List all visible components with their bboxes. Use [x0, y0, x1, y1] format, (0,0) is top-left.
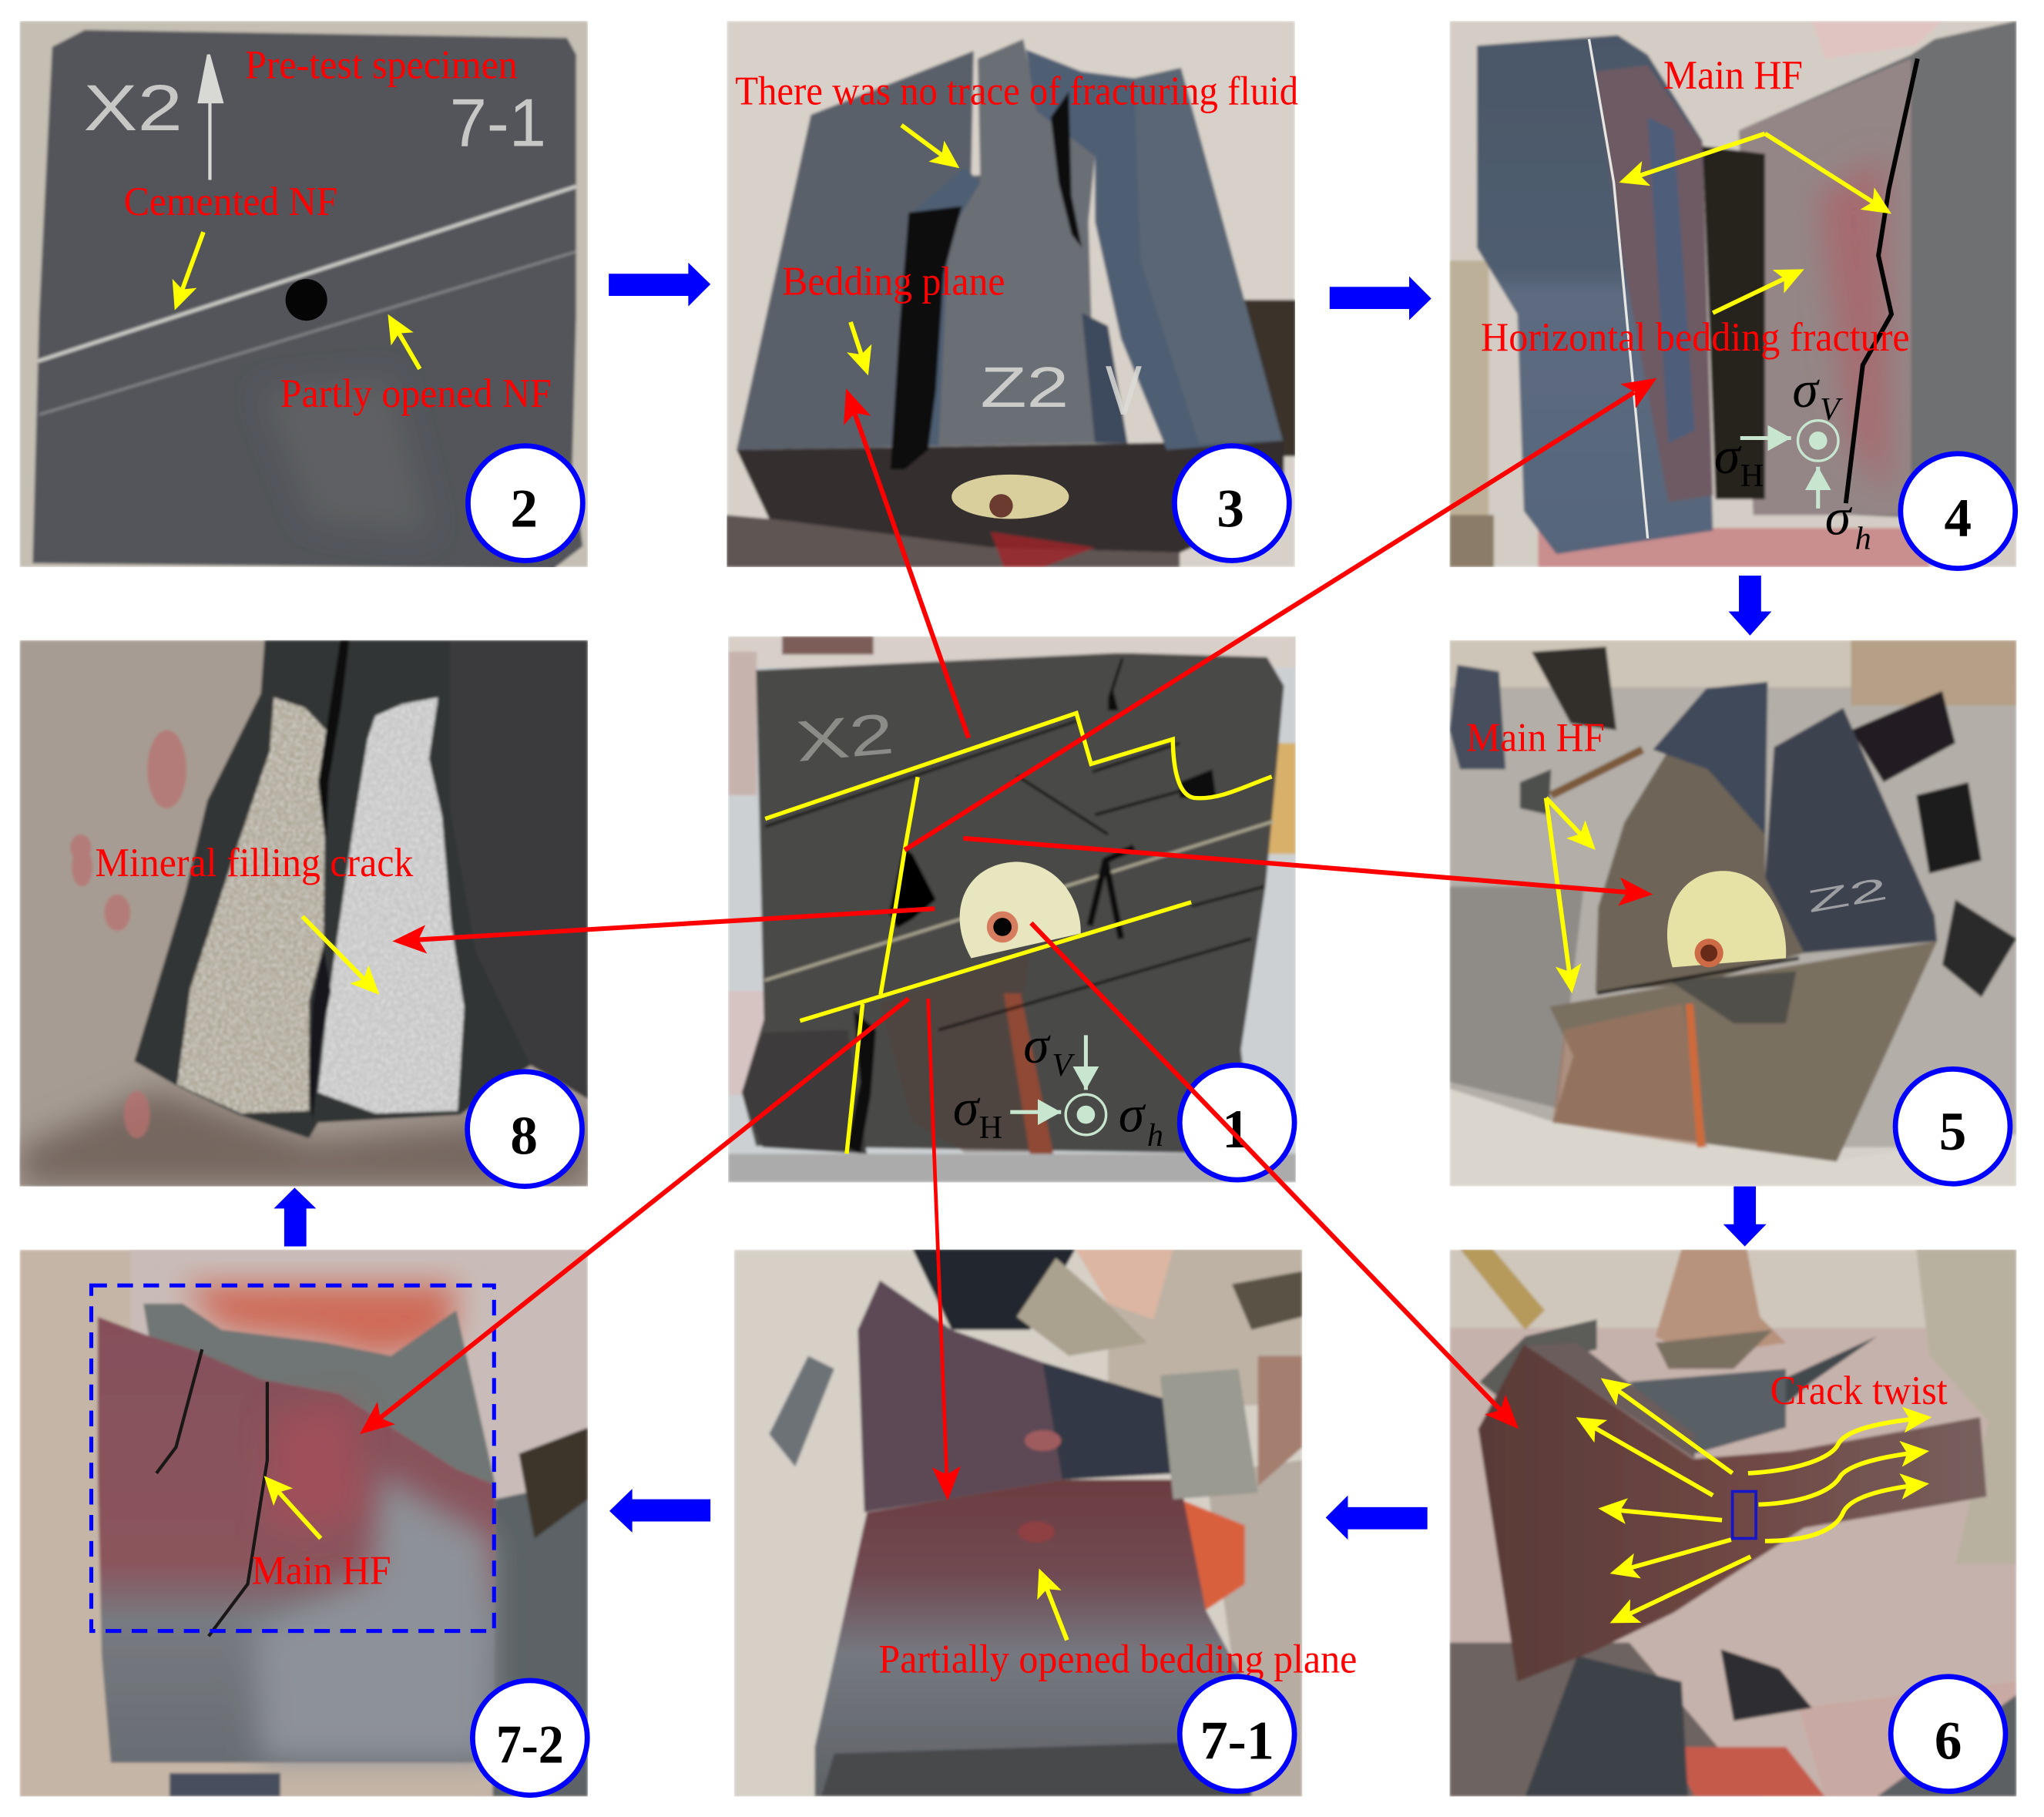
panel 4: main HF and bedding fracture [1449, 21, 2016, 567]
chalk mark X2: X2 [794, 701, 896, 774]
label: Main HF [1466, 716, 1605, 761]
badge 7-1 [1180, 1677, 1294, 1792]
arrow: main HF upper [1546, 798, 1596, 850]
red arrow: to panel 3 [846, 388, 968, 738]
crack: main HF trace [1846, 59, 1918, 503]
arrow: main HF right [1765, 133, 1891, 213]
label: Mineral filling crack [96, 841, 414, 885]
icon: borehole [286, 279, 327, 321]
panel 3: fractured specimen [726, 21, 1298, 567]
stress symbol: σ [1119, 1086, 1146, 1144]
icon: pipe [989, 494, 1013, 518]
arrow: partly opened NF [388, 314, 420, 369]
stress symbol: V [1820, 391, 1843, 428]
icon: pipe [987, 912, 1018, 942]
stress symbol: h [1855, 520, 1871, 556]
chalk mark Z2: Z2 [1804, 871, 1890, 919]
badge 8: 8 [510, 1106, 538, 1166]
stress symbol: σ [1825, 489, 1853, 546]
badge 7-2 [472, 1681, 587, 1795]
stress symbol: σ [1023, 1016, 1051, 1074]
vein: white line [1589, 39, 1648, 539]
fracture trace lines [765, 713, 1272, 1154]
blue arrow: 7-1 to 7-2 [609, 1489, 710, 1533]
crack: main HF [156, 1349, 267, 1636]
stress symbol: h [1147, 1117, 1163, 1154]
label: Bedding plane [782, 259, 1005, 304]
chalk mark V: V [1106, 351, 1142, 430]
stress symbol: V [1052, 1047, 1075, 1083]
blue arrow: 2 to 3 [609, 263, 710, 307]
arrow: bedding plane [1039, 1568, 1067, 1640]
stress symbol [1714, 361, 1871, 556]
label: Main HF [252, 1549, 391, 1594]
stress symbol: σ [953, 1079, 981, 1137]
arrow: main HF left [1619, 133, 1765, 183]
chalk mark Z2: Z2 [980, 355, 1069, 419]
icon: injection dish [960, 861, 1081, 959]
chalk arrow [200, 55, 222, 180]
blue arrow: 3 to 4 [1330, 277, 1431, 320]
stress symbol: σ [1792, 361, 1820, 418]
panel 2: pre-test specimen [19, 21, 588, 569]
badge 1: 1 [1222, 1100, 1250, 1160]
badge 8 [468, 1072, 582, 1187]
blue arrow: 7-2 to 8 [274, 1187, 316, 1246]
panel 5: main HF opened [1449, 640, 2016, 1187]
label: Main HF [1663, 53, 1803, 98]
icon: injection dish [1667, 871, 1786, 967]
label: Partly opened NF [280, 371, 552, 416]
arrows: straight fracture paths [1576, 1378, 1750, 1623]
stress symbol: σ [1714, 427, 1742, 485]
badge 3: 3 [1217, 479, 1244, 539]
arrow: no fluid trace [901, 125, 959, 168]
panel 7-2: main HF on bedding plane [19, 1249, 588, 1797]
red arrow: to panel 5 [963, 838, 1653, 895]
dashed region box [91, 1285, 494, 1631]
chalk mark X2: X2 [83, 71, 183, 144]
badge 2 [468, 446, 582, 561]
label: Crack twist [1770, 1369, 1948, 1413]
stress symbol [953, 1016, 1163, 1154]
arrows: curved twist paths [1748, 1417, 1932, 1541]
blue arrow: 5 to 6 [1723, 1187, 1767, 1246]
red arrow: to panel 8 [392, 908, 935, 942]
blue arrow: 4 to 5 [1729, 576, 1771, 636]
icon: pipe [1695, 939, 1723, 967]
arrow: mineral filling [303, 916, 379, 995]
label: Partially opened bedding plane [878, 1637, 1357, 1682]
badge 5: 5 [1939, 1102, 1966, 1162]
blue arrow: 6 to 7-1 [1326, 1496, 1428, 1540]
panel 8: mineral filling crack [19, 640, 588, 1187]
panel 1: specimen after test [728, 636, 1297, 1183]
badge 7-2: 7-2 [496, 1715, 564, 1775]
badge 6: 6 [1935, 1711, 1962, 1771]
badge 2: 2 [510, 479, 538, 539]
panel 7-1: partially opened bedding plane [734, 1249, 1357, 1797]
arrow: main HF lower [1546, 798, 1572, 993]
red arrow: to panel 7-1 [928, 999, 948, 1500]
badge 4: 4 [1945, 488, 1972, 548]
badge 7-1: 7-1 [1200, 1711, 1274, 1771]
icon: injection dish [952, 475, 1069, 519]
badge 4 [1901, 454, 2015, 569]
stress symbol: H [979, 1110, 1002, 1146]
marker: blue box [1733, 1492, 1756, 1538]
label: Horizontal bedding fracture [1481, 315, 1910, 360]
red arrow: to panel 4 [905, 378, 1656, 850]
arrow: bedding plane [851, 322, 868, 375]
label: There was no trace of fracturing fluid [735, 69, 1298, 113]
red arrow: to panel 6 [1031, 923, 1519, 1429]
arrow: cemented NF [175, 232, 203, 311]
label: Cemented NF [124, 180, 337, 224]
red arrow: to panel 7-2 [360, 999, 908, 1434]
badge 6 [1891, 1677, 2005, 1792]
panel 6: crack twist [1449, 1249, 2016, 1797]
chalk mark 7-1: 7-1 [450, 84, 546, 160]
label: Pre-test specimen [245, 43, 518, 88]
arrow: main HF [264, 1476, 321, 1538]
badge 5 [1895, 1069, 2010, 1184]
badge 3 [1174, 446, 1289, 561]
badge 1 [1180, 1065, 1294, 1180]
stress symbol: H [1740, 458, 1764, 494]
arrow: bedding fracture [1713, 269, 1804, 313]
